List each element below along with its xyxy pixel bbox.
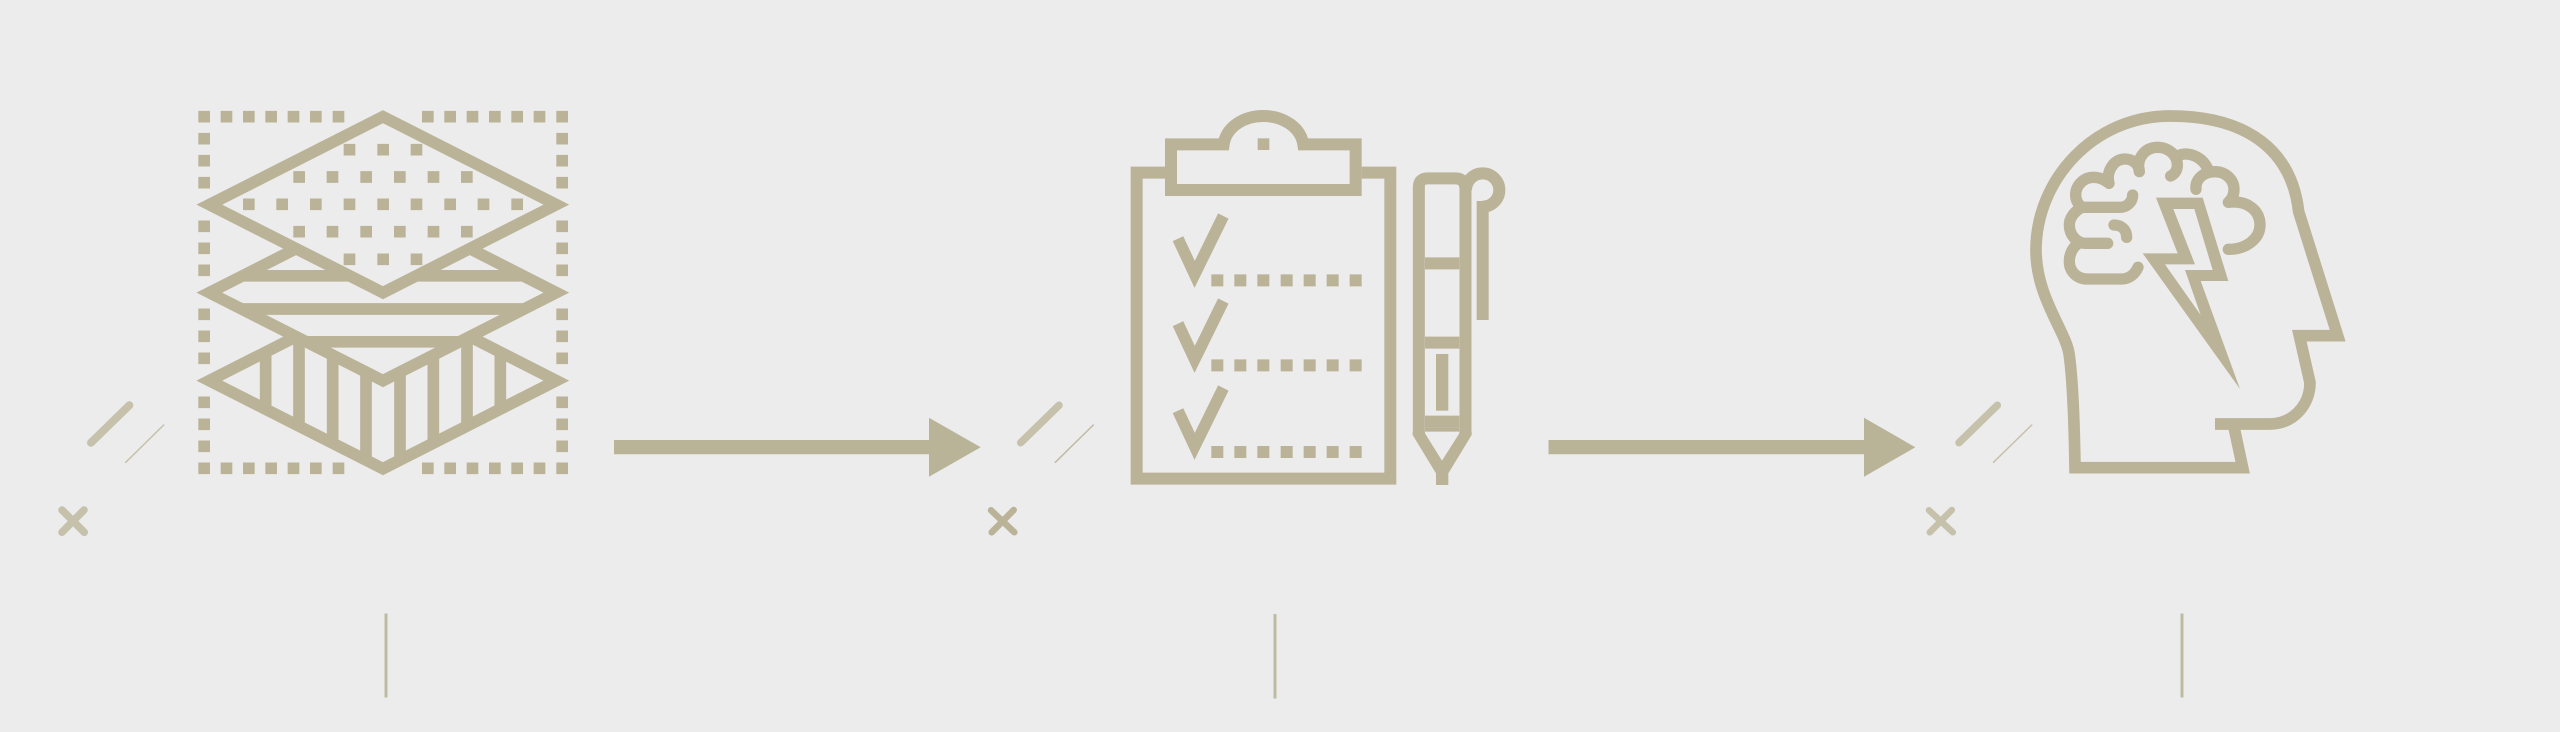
dotted square frame [198, 117, 568, 468]
checklist dots [1211, 280, 1362, 452]
clipboard board [1137, 173, 1390, 479]
middle diamond [209, 249, 556, 381]
arrow: first to second [614, 418, 981, 477]
bottom diamond [209, 337, 556, 469]
lightning bolt [2143, 198, 2240, 389]
vertical divider: left [384, 614, 388, 698]
head outline [2036, 116, 2338, 468]
pen tip [1413, 428, 1472, 485]
dots in top diamond [243, 150, 523, 259]
icon: head with brain and lightning [2036, 116, 2338, 468]
pen body [1419, 178, 1465, 434]
icon: clipboard with checklist [1137, 116, 1499, 485]
arrow: second to third [1548, 418, 1915, 477]
top diamond [209, 117, 556, 293]
checkmarks [1178, 216, 1223, 446]
accent marks: left [62, 405, 164, 532]
accent marks: middle [991, 405, 1093, 532]
icon: layered diamonds [198, 117, 568, 469]
brain [2069, 147, 2260, 279]
stripes in middle diamond [241, 276, 525, 342]
clip hole [1258, 138, 1269, 150]
clipboard clip [1171, 116, 1356, 190]
vertical divider: middle [1274, 614, 1276, 698]
accent marks: right [1929, 405, 2032, 532]
pen label bar [1436, 354, 1448, 411]
vertical stripes in bottom diamond [266, 338, 500, 460]
pen clip [1466, 173, 1499, 320]
vertical divider: right [2180, 614, 2184, 698]
